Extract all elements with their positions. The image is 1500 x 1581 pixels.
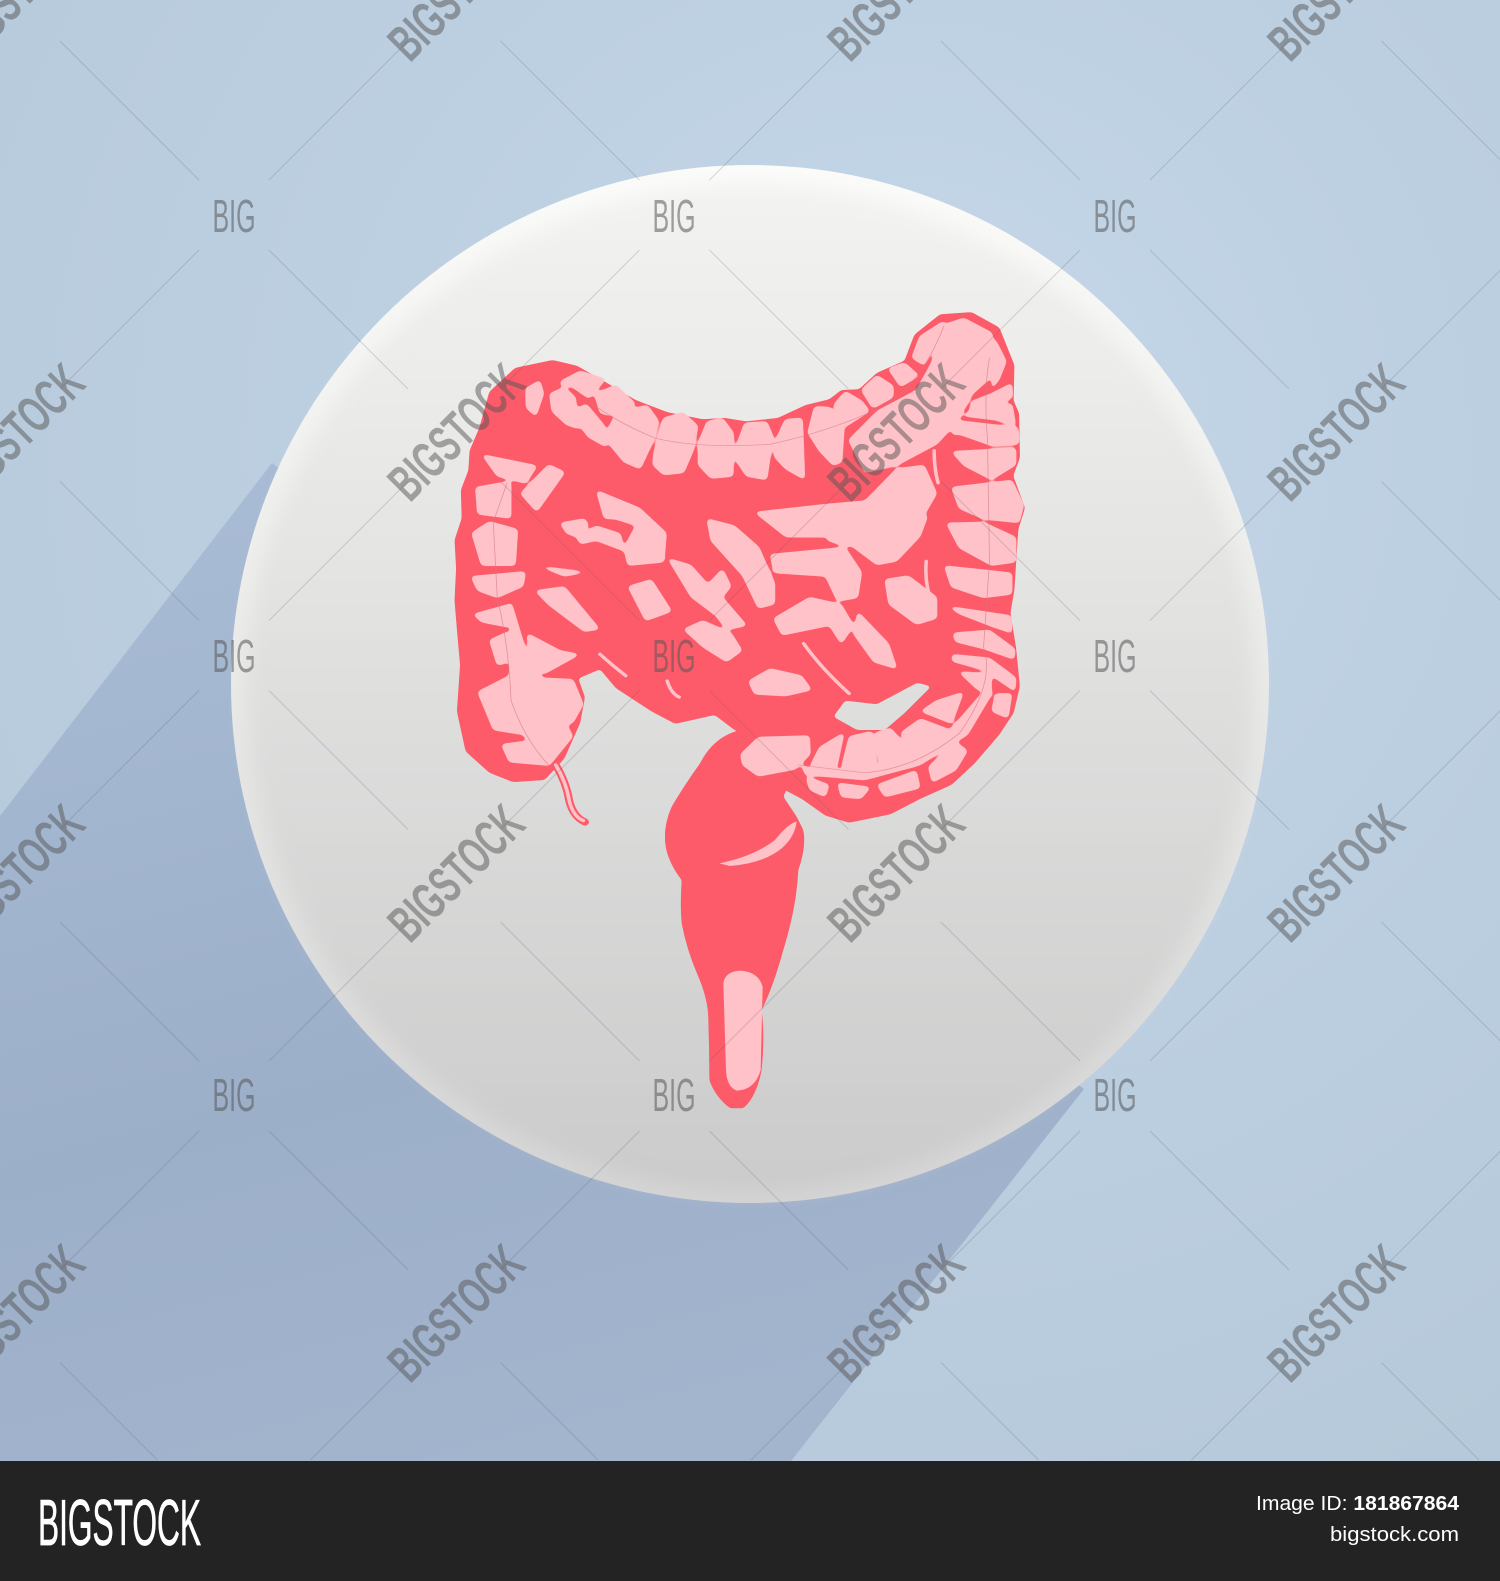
watermark: BIG labels: BIG	[652, 630, 696, 682]
descending colon segments	[960, 404, 1016, 426]
footer bar	[0, 1461, 1500, 1581]
watermark: BIGSTOCK labels: BIGSTOCK	[378, 1234, 536, 1393]
watermark: BIGSTOCK labels: BIGSTOCK	[818, 1234, 976, 1393]
round button	[231, 165, 1269, 1203]
rectum	[665, 730, 813, 1108]
watermark: BIGSTOCK labels: BIGSTOCK	[378, 353, 536, 512]
sigmoid band and segments	[800, 674, 992, 780]
watermark: BIG labels: BIG	[652, 1069, 696, 1121]
footer bar: BIGSTOCK	[38, 1486, 201, 1559]
pink folds	[471, 318, 1024, 799]
watermark: BIGSTOCK labels: BIGSTOCK	[378, 794, 536, 953]
watermark: BIG labels: BIG	[212, 190, 256, 242]
watermark: BIG labels	[212, 190, 1136, 1121]
appendix	[556, 765, 585, 822]
watermark: BIG labels: BIG	[212, 1069, 256, 1121]
watermark: BIG labels: BIG	[1094, 190, 1136, 242]
colon and small intestine	[455, 312, 1025, 823]
watermark: BIGSTOCK labels: BIGSTOCK	[1258, 353, 1416, 512]
icon: intestines	[455, 312, 1025, 1108]
watermark: BIGSTOCK labels: BIGSTOCK	[818, 794, 976, 953]
watermark: BIG labels: BIG	[1094, 630, 1136, 682]
small intestine loops	[520, 464, 565, 512]
watermark: BIGSTOCK labels: BIGSTOCK	[818, 353, 976, 512]
watermark: BIGSTOCK labels: BIGSTOCK	[1258, 794, 1416, 953]
watermark: BIGSTOCK labels: BIGSTOCK	[1258, 1234, 1416, 1393]
watermark: BIG labels: BIG	[652, 190, 696, 242]
long shadow of the button	[0, 463, 1084, 1461]
site url: bigstock.com	[1330, 1524, 1459, 1546]
watermark: BIG labels: BIG	[212, 630, 256, 682]
red silhouette	[455, 312, 1025, 823]
thin loop of the sigmoid flexure and small details	[600, 451, 938, 697]
ascending colon segments and caecum	[481, 454, 538, 484]
transverse colon segments	[526, 380, 544, 417]
contour lines across the folds	[493, 326, 989, 773]
watermark: BIG labels: BIG	[1094, 1069, 1136, 1121]
image id: Image ID: 181867864	[1256, 1493, 1460, 1515]
